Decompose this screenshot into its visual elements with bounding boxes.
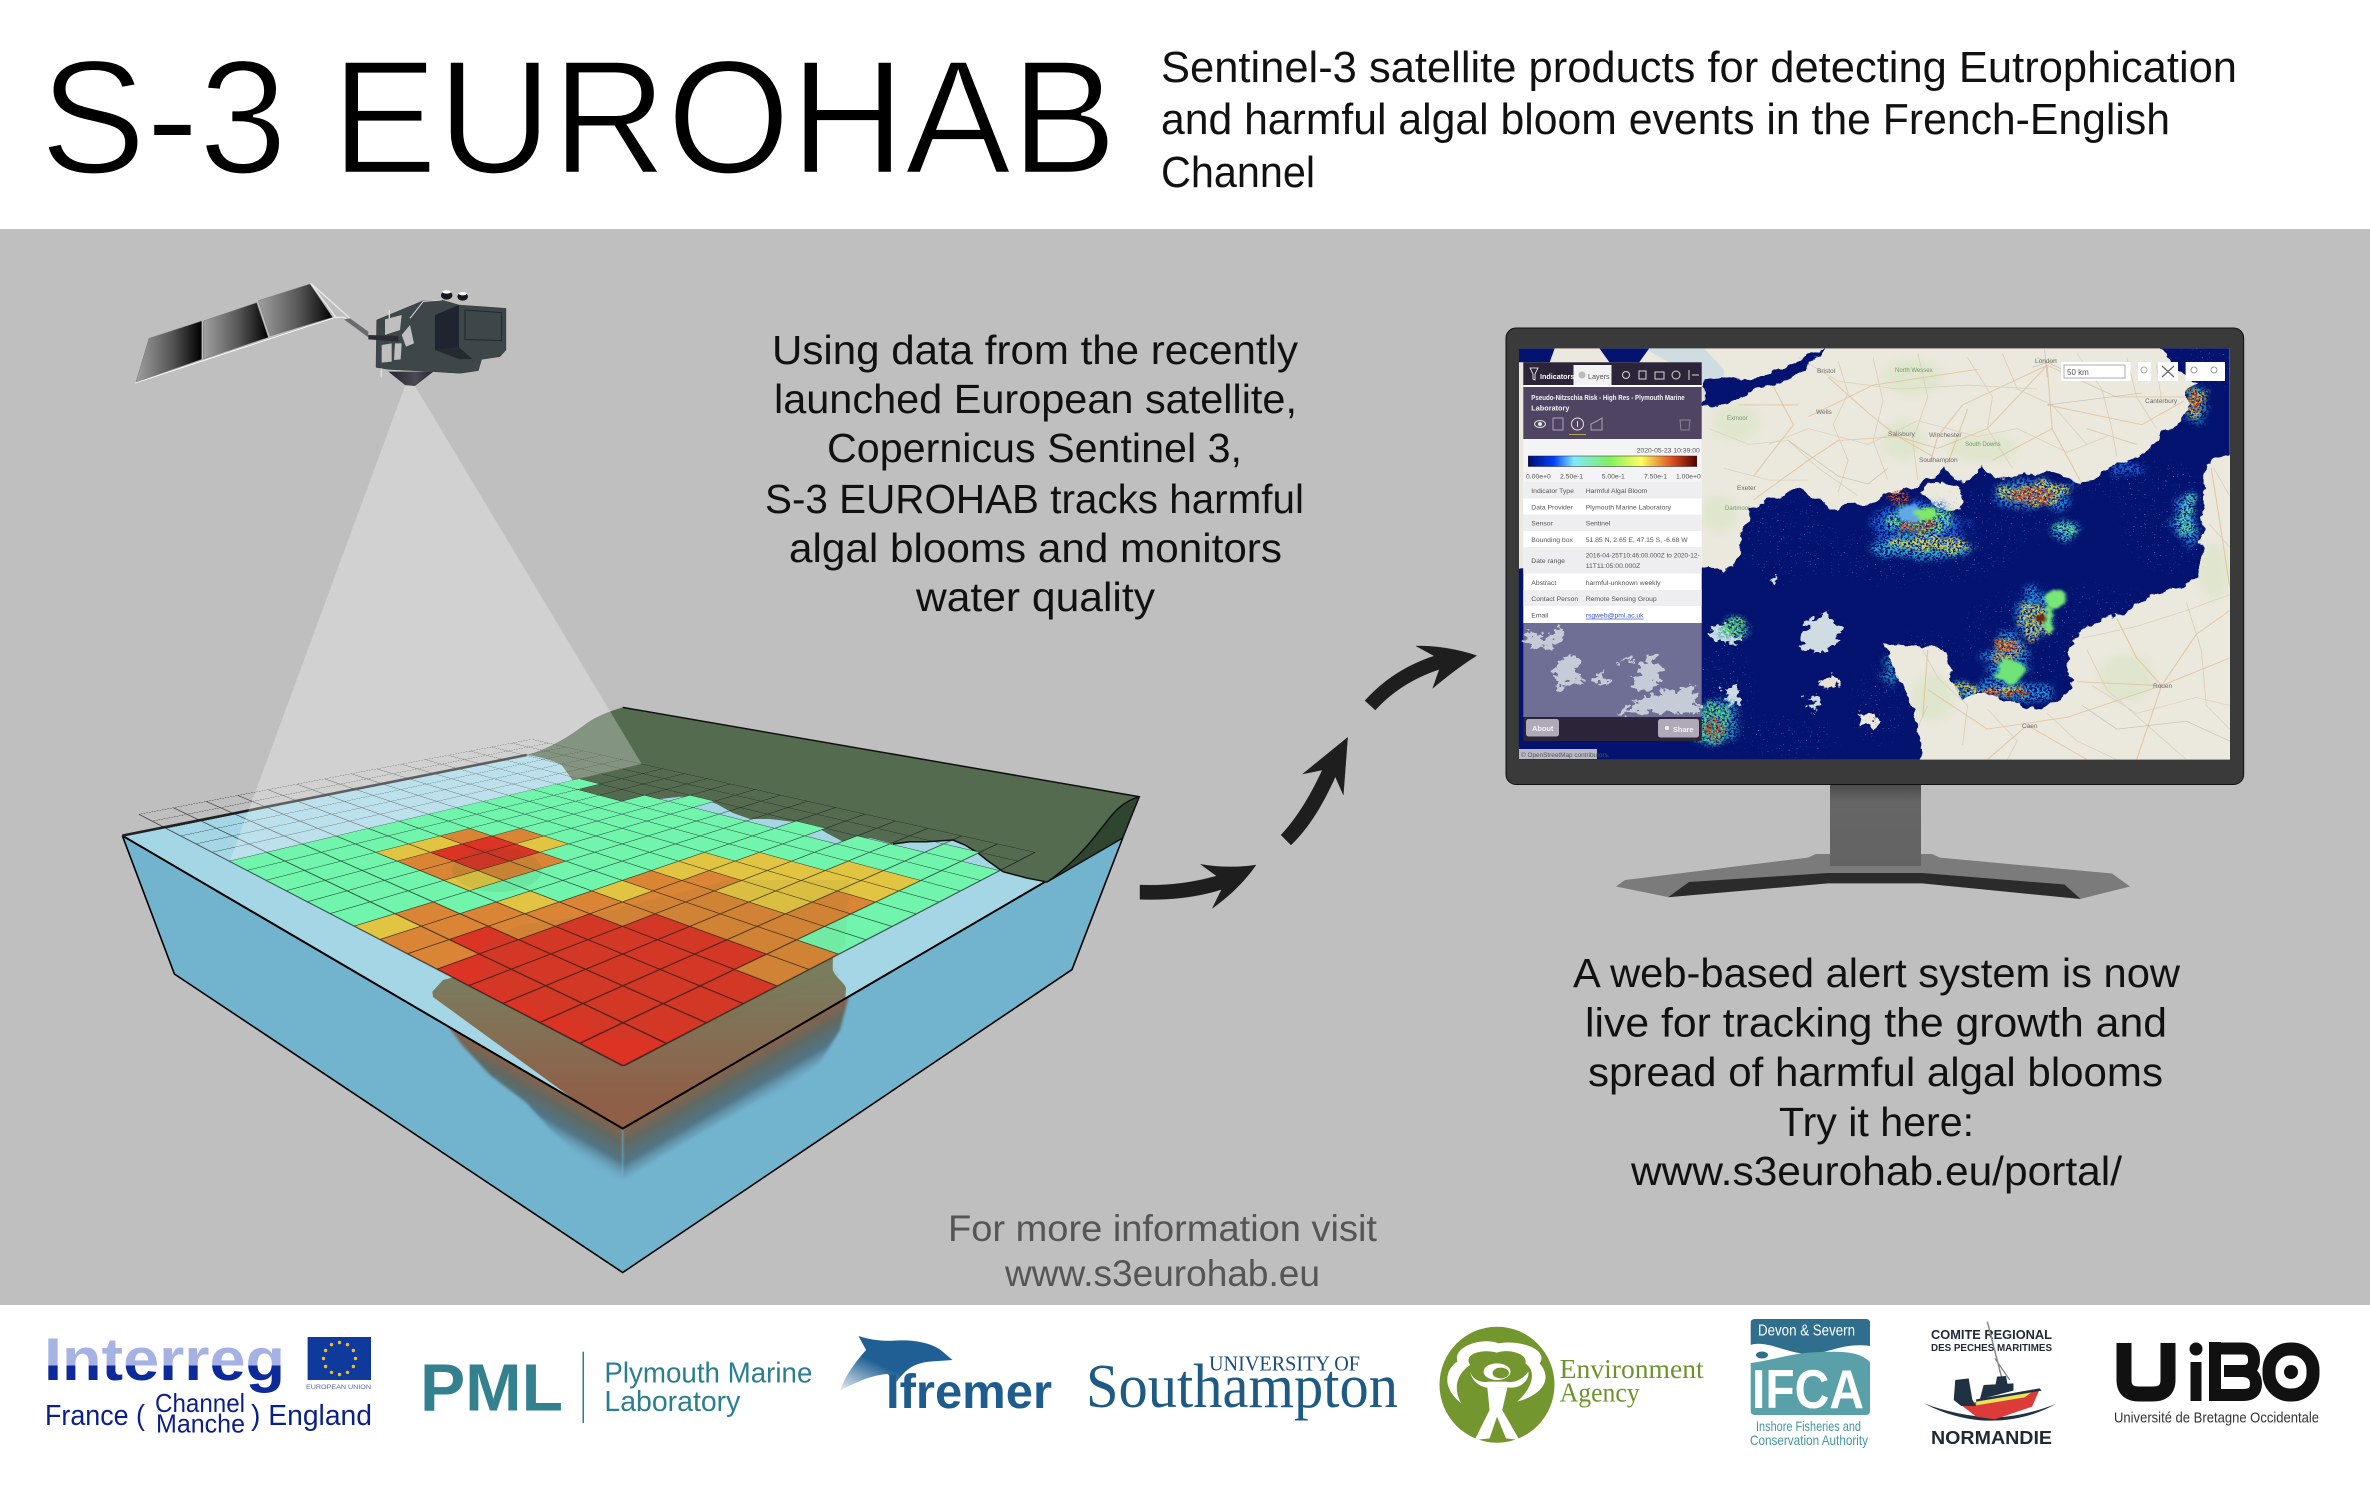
logo: Environment Agency (1440, 1327, 1704, 1443)
logo: Interreg: Channel (155, 1388, 245, 1418)
text: more information: www.s3eurohab.eu (1004, 1253, 1320, 1294)
legend: 5.00e-1 (1602, 473, 1625, 480)
monitor stand neck (1830, 780, 1921, 866)
logo: University of Southampton: UNIVERSITY OF (1209, 1352, 1360, 1376)
algal plume right depth (623, 992, 850, 1180)
monitor (1506, 328, 2244, 899)
legend: 7.50e-1 (1644, 473, 1667, 480)
logo: Comite Regional Normandie: COMITE REGIONAL (1931, 1328, 2052, 1342)
metadata table: Sentinel (1586, 520, 1611, 528)
logo: Devon and Severn IFCA: Conservation Authority (1750, 1432, 1868, 1448)
grid lines (139, 739, 1035, 1066)
translucent cloud area (1523, 623, 1702, 717)
panel tab bar: Layers (1588, 372, 1610, 381)
map controls (2061, 362, 2225, 381)
layer header: Pseudo-Nitzschia Risk - High Res - Plymouth Marine (1531, 393, 1685, 402)
metadata table: Abstract (1531, 580, 1556, 587)
metadata table: Email (1531, 613, 1549, 620)
panel footer buttons: About (1532, 724, 1554, 733)
block edges (122, 755, 1123, 1272)
text: satellite data explanation: S-3 EUROHAB tracks harmful (765, 476, 1304, 522)
main roads (1739, 365, 2230, 760)
metadata table: Date range (1531, 558, 1565, 565)
text: more information: For more information visit (948, 1208, 1378, 1249)
metadata table: Bounding box (1531, 537, 1573, 544)
risk grid: 20 by 15 cells in perspective (138, 739, 1036, 1066)
logo: Environment Agency: Environment (1560, 1354, 1704, 1384)
logo: Comite Regional Normandie (1924, 1322, 2057, 1448)
EU flag (308, 1337, 371, 1380)
sensor swath cone (230, 386, 642, 861)
subtitle: Sentinel-3 satellite products for detecting Eutrophication (1161, 43, 2237, 92)
map place labels (1737, 358, 2178, 730)
metadata table: 11T11:05:00.000Z (1586, 563, 1640, 570)
bright bloom cores (1897, 505, 2066, 684)
minor roads (1709, 353, 2230, 760)
logo: Comite Regional Normandie: NORMANDIE (1931, 1428, 2052, 1448)
text: alert system: spread of harmful algal blooms (1588, 1049, 2163, 1095)
algal plume surface (432, 950, 846, 1135)
logo: PML: Laboratory (604, 1386, 741, 1418)
logo: Comite Regional Normandie: DES PECHES MARITIMES (1931, 1343, 2052, 1354)
metadata table: 2016-04-25T10:46:00.000Z to 2020-12- (1586, 552, 1700, 560)
land outline (623, 707, 1139, 882)
map place labels: Southampton (1919, 457, 1958, 464)
text: alert system: A web-based alert system is now (1573, 950, 2180, 996)
map attribution (1519, 749, 1610, 759)
spacecraft body (376, 300, 506, 373)
logo: PML: Plymouth Marine (604, 1358, 812, 1390)
logo: Interreg: Interreg (44, 1326, 285, 1393)
metadata table: rsgweb@pml.ac.uk (1586, 613, 1644, 620)
logo: Interreg: EUROPEAN UNION (306, 1384, 371, 1391)
algal bloom speckle layers (1689, 342, 2236, 757)
title: S-3 EUROHAB (40, 27, 1117, 208)
text: alert system (1573, 950, 2180, 1194)
green low risk cells (229, 769, 1018, 1066)
logo: Interreg: Manche (156, 1409, 245, 1439)
red very high risk cells (286, 836, 839, 1066)
water side faces (122, 836, 1123, 1272)
water top face (122, 755, 1123, 1129)
arrow 3 (1365, 646, 1477, 710)
text: alert system: www.s3eurohab.eu/portal/ (1630, 1148, 2123, 1194)
text: satellite data explanation: launched European satellite, (774, 376, 1297, 422)
blue bloom pixels (1689, 380, 2207, 745)
layer header: Laboratory (1531, 404, 1570, 412)
subtitle: and harmful algal bloom events in the French-English (1161, 95, 2170, 144)
map controls: 50 km (2067, 368, 2089, 377)
subtitle (1161, 43, 2237, 197)
land front face (1047, 797, 1139, 882)
text: alert system: live for tracking the growth and (1585, 1000, 2167, 1046)
map place labels: Wells (1816, 409, 1833, 416)
green and yellow bloom pixels (1695, 384, 2204, 741)
metadata table: Remote Sensing Group (1586, 596, 1657, 603)
arrows from ocean block to monitor (1140, 646, 1477, 909)
map screen: Exmoor (1727, 416, 1748, 422)
land surface (527, 707, 1139, 882)
map attribution: © OpenStreetMap contributors. (1521, 751, 1610, 759)
metadata table: Harmful Algal Bloom (1586, 488, 1648, 495)
map screen: Dartmoor (1725, 506, 1750, 512)
bristol channel (1704, 348, 1823, 405)
antenna caps (441, 290, 468, 301)
metadata table: 51.85 N, 2.65 E, 47.15 S, -6.68 W (1586, 537, 1688, 544)
logo: Devon and Severn IFCA: Inshore Fisheries and (1756, 1418, 1861, 1434)
legend: 2.50e-1 (1560, 473, 1583, 480)
panel tab bar (1523, 362, 1702, 387)
text: alert system: Try it here: (1779, 1099, 1974, 1145)
text: satellite data explanation: algal blooms and monitors (789, 525, 1282, 571)
legend: 2020-05-23 10:39:00 (1637, 448, 1700, 455)
logo: Interreg: France ( (45, 1400, 145, 1432)
map place labels: Bristol (1817, 368, 1836, 375)
yellow medium risk cells (266, 795, 921, 1043)
ocean block and land (122, 706, 1140, 1274)
logo: Environment Agency: Agency (1560, 1378, 1640, 1408)
solar panel boom (311, 283, 368, 335)
diagram: ocean block with satellite (122, 283, 1140, 1274)
metadata table: Plymouth Marine Laboratory (1586, 504, 1672, 512)
arrow 1 (1140, 864, 1256, 908)
map place labels: Exeter (1737, 485, 1757, 492)
red bloom pixels (1703, 386, 2201, 741)
body panels (382, 315, 414, 363)
orange high risk cells (266, 808, 916, 1066)
fishing boat (1924, 1322, 2057, 1421)
tree figure (1447, 1341, 1546, 1440)
map place labels: Salisbury (1888, 431, 1915, 438)
satellite (135, 283, 506, 386)
instrument lens (388, 372, 433, 386)
sparse scattered pixels (1694, 342, 2236, 757)
text: satellite data explanation: Copernicus Sentinel 3, (827, 425, 1242, 471)
map place labels: Caen (2022, 723, 2038, 730)
legend: 0.00e+0 (1526, 473, 1551, 480)
logo: Devon and Severn IFCA: IFCA (1752, 1358, 1864, 1420)
map place labels: Rouen (2153, 683, 2173, 690)
text: satellite data explanation (765, 327, 1304, 620)
text: satellite data explanation: Using data from the recently (772, 327, 1299, 373)
map screen: North Wessex (1895, 368, 1933, 374)
legend (1523, 439, 1702, 532)
top left waters (1648, 348, 1724, 401)
metadata table: harmful-unknown weekly (1586, 580, 1661, 587)
land tint patches (1701, 359, 2229, 721)
map place labels: London (2035, 358, 2057, 365)
subtitle: Channel (1161, 148, 1315, 197)
isle of wight (1918, 480, 1963, 510)
monitor bezel (1506, 328, 2244, 784)
layer header (1523, 387, 1702, 439)
panel footer buttons: Share (1673, 725, 1694, 734)
logo: Interreg: ) England (251, 1400, 372, 1432)
submerged plume tint on cells (452, 848, 850, 1040)
logo: Devon and Severn IFCA (1750, 1319, 1870, 1448)
logo: Ifremer (840, 1336, 1052, 1419)
text: more information (948, 1208, 1542, 1400)
solar panels (136, 284, 333, 382)
panel footer buttons (1523, 717, 1702, 741)
satellite and sensor cone (135, 283, 850, 976)
logo: Interreg (44, 1326, 372, 1439)
english channel sea (1518, 348, 2230, 760)
logo: Ifremer: Ifremer (886, 1366, 1052, 1419)
header band (0, 0, 2370, 229)
panel tab bar: Indicators (1540, 372, 1574, 381)
logo: University of Southampton: Southampton (1086, 1353, 1398, 1421)
legend: 1.00e+0 (1676, 473, 1701, 480)
portal side panel (1523, 362, 1702, 741)
logo: Devon and Severn IFCA: Devon & Severn (1758, 1323, 1855, 1340)
logo: UBO: Université de Bretagne Occidentale (2114, 1410, 2319, 1427)
map place labels: Canterbury (2145, 398, 2178, 405)
metadata table: Sensor (1531, 520, 1554, 528)
map screen (1518, 348, 2230, 760)
channel islands and cloud gaps (1709, 576, 1880, 729)
map place labels: Winchester (1929, 432, 1962, 439)
metadata table: Contact Person (1531, 596, 1578, 603)
metadata table (1523, 482, 1702, 623)
metadata table: Data Provider (1531, 504, 1574, 512)
logo: UBO (2114, 1342, 2319, 1427)
text: satellite data explanation: water quality (915, 574, 1156, 620)
metadata table: Indicator Type (1531, 488, 1574, 495)
footer logos band (0, 1305, 2370, 1502)
monitor stand base (1616, 854, 2130, 899)
algal plume left depth (445, 1022, 623, 1180)
logo: PML (420, 1351, 812, 1426)
logo: PML: PML (420, 1351, 563, 1426)
arrow 2 (1281, 737, 1348, 845)
map screen: South Downs (1965, 442, 2001, 448)
